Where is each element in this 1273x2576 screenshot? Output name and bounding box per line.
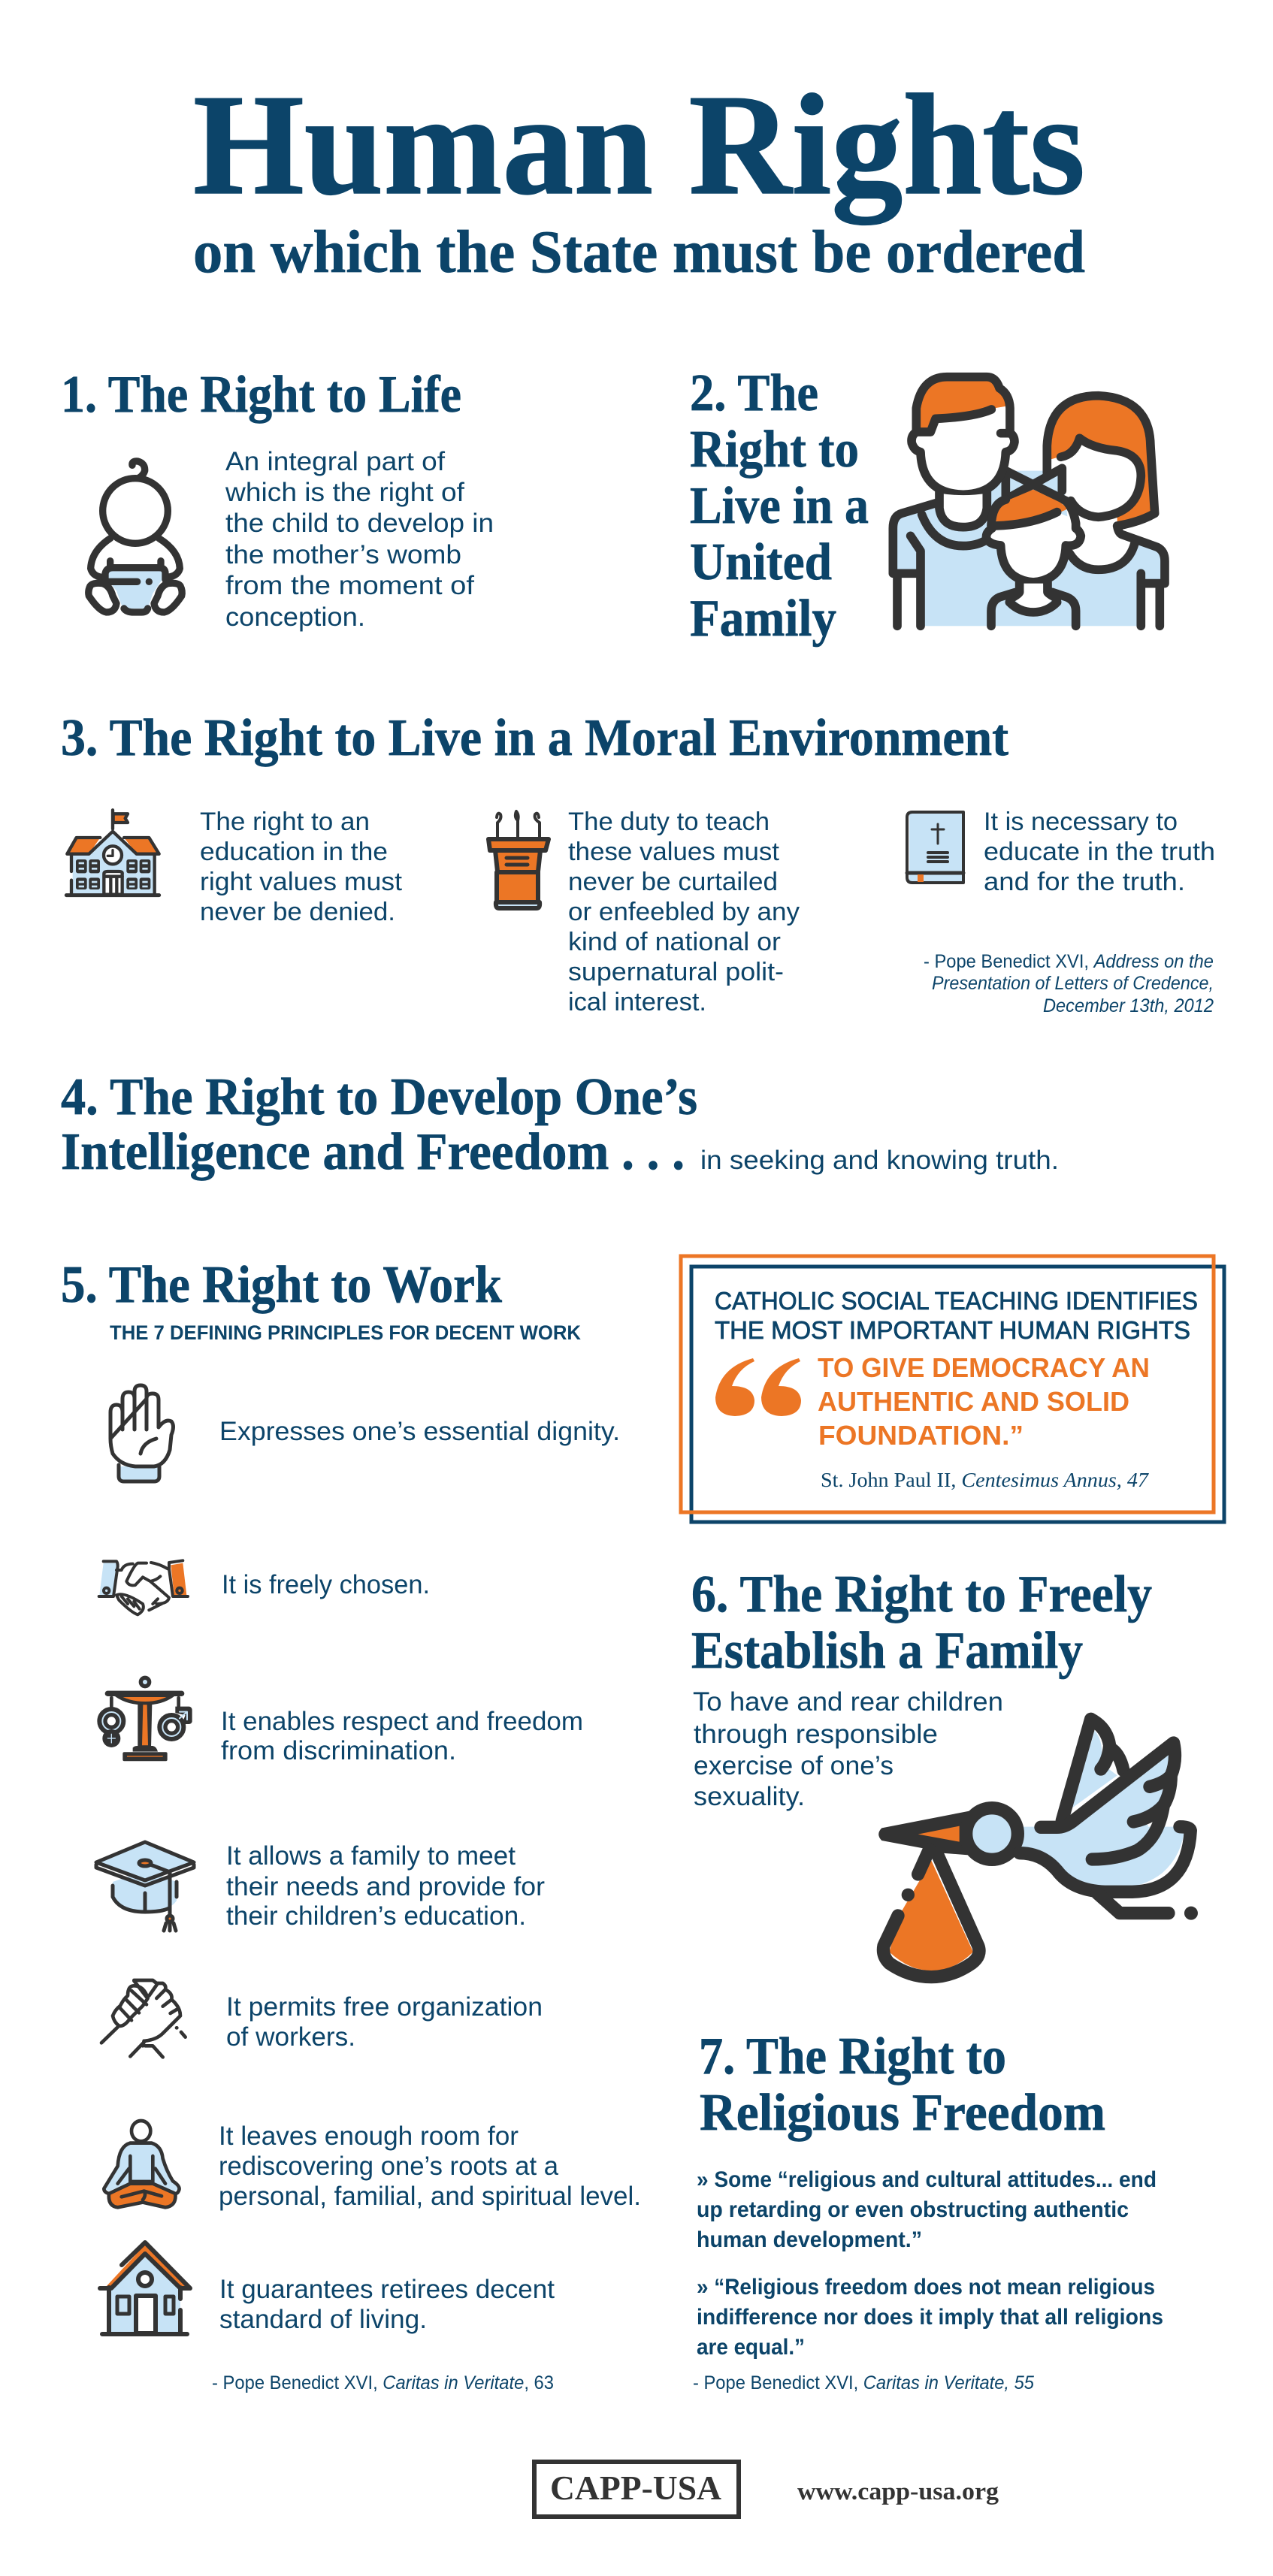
heading: right to freely establish a family: 6. The Right to Freely — [691, 1566, 1152, 1623]
citation: caritas in veritate 55: - Pope Benedict XVI, Caritas in Veritate, 55 — [693, 2372, 1034, 2393]
text: truth: educate in the truth — [984, 838, 1215, 866]
text: education: education in the — [200, 838, 388, 866]
subheading: seven principles: THE 7 DEFINING PRINCIPLES FOR DECENT WORK — [110, 1321, 581, 1344]
text: right to life body: conception. — [225, 602, 365, 632]
text: right to life body: An integral part of — [225, 447, 445, 476]
text: rear children: To have and rear children — [693, 1687, 1003, 1717]
text: freely chosen: It is freely chosen. — [222, 1570, 430, 1599]
text: truth: and for the truth. — [984, 868, 1185, 896]
heading: right to live in a united family: 2. The — [690, 364, 818, 422]
text: duty to teach: these values must — [568, 838, 780, 866]
icon: baby — [89, 461, 182, 612]
text: education — [200, 808, 403, 926]
icon: meditating person — [104, 2121, 180, 2207]
title: Human Rights — [193, 65, 1085, 225]
text: religious freedom quotes — [697, 2167, 1163, 2360]
citation: letters of credence: Presentation of Letters of Credence, — [932, 973, 1214, 994]
callout: quote box: AUTHENTIC AND SOLID — [818, 1386, 1129, 1417]
heading: intelligence and freedom — [61, 1068, 697, 1181]
text: right to life body: which is the right of — [225, 478, 464, 507]
text: right to life body — [225, 447, 494, 632]
text: education: right values must — [200, 868, 403, 896]
text: religious freedom quotes: indifference nor does it imply that all religions — [697, 2305, 1163, 2330]
icon: scale with gender symbols — [99, 1678, 192, 1761]
icon: handshake — [99, 1560, 188, 1614]
text: religious freedom quotes: up retarding or even obstructing authentic — [697, 2197, 1129, 2222]
heading: right to live in a united family: United — [690, 533, 832, 591]
text: retirees: standard of living. — [219, 2305, 427, 2334]
text: free organization — [226, 1992, 543, 2052]
text: rear children: sexuality. — [694, 1782, 805, 1811]
text: duty to teach: supernatural polit- — [568, 958, 784, 986]
text: retirees — [219, 2275, 555, 2334]
logo: CAPP-USA: CAPP-USA — [550, 2469, 721, 2507]
text: right to life body: from the moment of — [225, 571, 474, 600]
text: family needs — [226, 1841, 545, 1931]
heading: right to work: 5. The Right to Work — [61, 1256, 502, 1314]
text: truth: It is necessary to — [984, 808, 1178, 836]
heading: moral environment: 3. The Right to Live in a Moral Environment — [61, 709, 1008, 767]
text: right to life body: the mother’s womb — [225, 540, 461, 569]
text: free organization: of workers. — [226, 2022, 355, 2052]
heading: religious freedom: Religious Freedom — [700, 2084, 1105, 2142]
title: on which the State must be ordered — [193, 219, 1085, 285]
heading: right to live in a united family — [690, 364, 869, 648]
text: rear children — [693, 1687, 1003, 1811]
callout: quote box: TO GIVE DEMOCRACY AN — [818, 1352, 1150, 1383]
citation: caritas in veritate 63: - Pope Benedict XVI, Caritas in Veritate, 63 — [212, 2372, 554, 2393]
text: education: never be denied. — [200, 898, 395, 926]
text: rediscovering roots: personal, familial, and spiritual level. — [219, 2182, 641, 2211]
text: rediscovering roots: rediscovering one’s roots at a — [219, 2152, 559, 2181]
text: religious freedom quotes: are equal.” — [697, 2335, 805, 2360]
text: truth — [984, 808, 1215, 896]
text: retirees: It guarantees retirees decent — [219, 2275, 555, 2304]
text: duty to teach: kind of national or — [568, 928, 781, 956]
heading: religious freedom — [699, 2028, 1105, 2142]
text: respect and freedom — [221, 1707, 583, 1765]
heading: religious freedom: 7. The Right to — [699, 2028, 1006, 2085]
callout: quote box: FOUNDATION.” — [818, 1420, 1024, 1451]
callout: quote box: THE MOST IMPORTANT HUMAN RIGHTS — [715, 1316, 1190, 1344]
heading: right to live in a united family: Family — [690, 590, 836, 648]
citation: letters of credence — [924, 951, 1214, 1016]
text: family needs: their children’s education. — [226, 1901, 526, 1931]
icon: podium — [488, 811, 549, 908]
text: duty to teach — [568, 808, 800, 1016]
icon: family — [893, 377, 1165, 626]
text: respect and freedom: It enables respect and freedom — [221, 1707, 583, 1736]
icon: clasped hands — [101, 1980, 186, 2057]
text: duty to teach: or enfeebled by any — [568, 898, 800, 926]
text: education: The right to an — [200, 808, 370, 836]
text: duty to teach: The duty to teach — [568, 808, 770, 836]
callout: quote box: CATHOLIC SOCIAL TEACHING IDENTIFIES — [715, 1287, 1198, 1315]
text: dignity: Expresses one’s essential dignity. — [219, 1417, 620, 1446]
citation: letters of credence: December 13th, 2012 — [1043, 995, 1214, 1016]
text: religious freedom quotes: » “Religious freedom does not mean religious — [697, 2275, 1155, 2300]
heading: right to freely establish a family: Establish a Family — [691, 1622, 1083, 1680]
heading: right to freely establish a family — [691, 1566, 1152, 1680]
citation: letters of credence: - Pope Benedict XVI, Address on the — [924, 951, 1214, 972]
heading: right to life: 1. The Right to Life — [61, 366, 461, 424]
heading: right to live in a united family: Right to — [690, 421, 859, 479]
text: family needs: It allows a family to meet — [226, 1841, 516, 1871]
text: right to life body: the child to develop in — [225, 509, 494, 538]
icon: house — [100, 2242, 190, 2334]
icon: graduation cap — [96, 1842, 194, 1931]
icon: quotation marks — [715, 1358, 801, 1416]
callout: quote box: St. John Paul II, Centesimus Annus, 47 — [821, 1469, 1150, 1491]
logo: CAPP-USA — [534, 2462, 739, 2517]
icon: stork with bundle — [878, 1719, 1198, 1977]
heading: intelligence and freedom: 4. The Right to Develop One’s — [61, 1068, 697, 1126]
text: respect and freedom: from discrimination. — [221, 1736, 456, 1765]
callout: quote box — [681, 1256, 1224, 1522]
icon: school — [66, 810, 159, 895]
heading: right to live in a united family: Live in a — [690, 477, 869, 535]
text: duty to teach: ical interest. — [568, 988, 706, 1016]
icon: bible — [907, 812, 963, 883]
text: religious freedom quotes: human development.” — [697, 2227, 922, 2252]
text: free organization: It permits free organization — [226, 1992, 543, 2022]
text: duty to teach: never be curtailed — [568, 868, 778, 896]
heading: intelligence and freedom: Intelligence and Freedom . . . — [61, 1123, 685, 1181]
text: religious freedom quotes: » Some “religious and cultural attitudes... end — [697, 2167, 1157, 2192]
footer url: www.capp-usa.org — [797, 2478, 999, 2505]
text: rear children: exercise of one’s — [694, 1751, 894, 1780]
text: seeking truth: in seeking and knowing truth. — [700, 1146, 1059, 1175]
text: family needs: their needs and provide for — [226, 1872, 545, 1901]
text: rediscovering roots: It leaves enough room for — [219, 2122, 519, 2151]
icon: raised hand — [110, 1385, 173, 1481]
text: rediscovering roots — [219, 2122, 641, 2211]
text: rear children: through responsible — [694, 1720, 938, 1749]
